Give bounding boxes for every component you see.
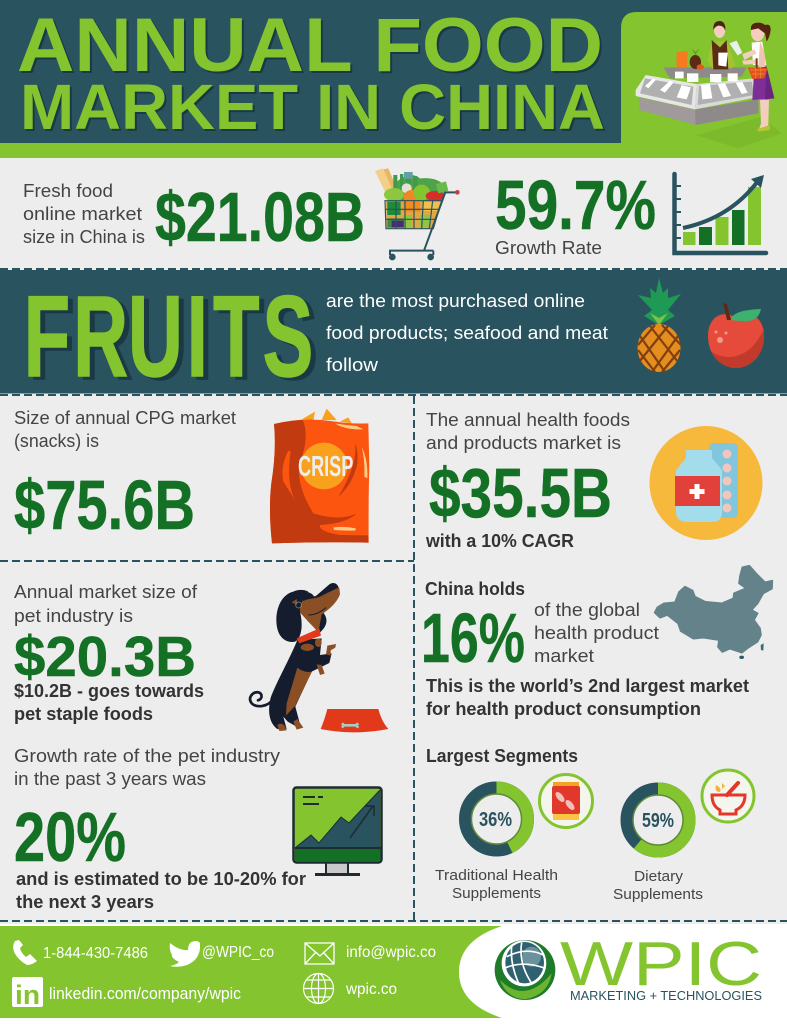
contact: website <box>304 974 397 1004</box>
text: CPG description: Size of annual CPG market <box>14 408 236 428</box>
text: of the global health product market: of the global <box>534 600 640 620</box>
stat: $21.08B: $21.08B <box>155 178 365 256</box>
text: marketing + technologies: MARKETING + TECHNOLOGIES <box>570 989 762 1003</box>
text: traditional health supplements label: Supplements <box>452 886 541 902</box>
stat: 20%: 20% <box>14 798 126 876</box>
text: of the global health product market: market <box>534 646 594 666</box>
text: 2nd largest market <box>426 676 749 719</box>
text: WPIC wordmark: WPIC <box>560 930 762 999</box>
icon: apple <box>708 303 764 368</box>
text: dietary supplements label <box>613 869 703 903</box>
text: health foods description: and products market is <box>426 433 621 453</box>
text: 2nd largest market: This is the world’s 2nd largest market <box>426 676 749 696</box>
text: pet growth estimate <box>16 869 306 912</box>
contact: linkedin: in <box>15 980 40 1010</box>
heading: FRUITS: FRUITS <box>24 272 313 401</box>
text: CAGR note: with a 10% CAGR <box>425 531 574 551</box>
chart: donut traditional health supplements 36%: 36% <box>479 809 512 831</box>
icon: WPIC globe <box>495 940 555 1000</box>
panel: header <box>0 0 787 158</box>
panel: fruits band <box>0 270 787 401</box>
text: fresh food description: Fresh food <box>23 181 113 201</box>
text: pet market description: Annual market size of <box>14 582 198 602</box>
text: health foods description <box>426 410 630 453</box>
icon: market counter with shopper <box>630 21 782 148</box>
text: pet growth estimate: the next 3 years <box>16 892 154 912</box>
title: MARKET IN CHINA <box>20 71 605 143</box>
chart: donut dietary supplements 59% <box>626 788 690 852</box>
contact: phone <box>13 940 148 965</box>
contact: email <box>305 943 436 964</box>
icon: pineapple <box>638 278 681 372</box>
logo: WPIC marketing + technologies <box>495 930 762 1003</box>
text: pet staple foods <box>14 681 204 724</box>
text: traditional health supplements label: Traditional Health <box>435 868 558 884</box>
text: CPG description <box>14 408 236 451</box>
text: health foods description: The annual health foods <box>426 410 630 430</box>
contact: linkedin: linkedin.com/company/wpic <box>49 985 241 1003</box>
text: dietary supplements label: Supplements <box>613 887 703 903</box>
text: fresh food description <box>23 181 145 247</box>
text: traditional health supplements label <box>435 868 558 902</box>
panel: health foods market <box>425 410 762 551</box>
icon: map of China <box>655 566 772 659</box>
text: pet staple foods: pet staple foods <box>14 704 153 724</box>
text: pet growth description: Growth rate of the pet industry <box>14 746 280 766</box>
text: China holds: China holds <box>425 579 525 599</box>
text: dietary supplements label: Dietary <box>634 869 684 885</box>
icon: dachshund and bowl <box>250 583 388 732</box>
icon: mortar and pestle <box>702 770 754 822</box>
title: ANNUAL FOOD <box>17 3 603 88</box>
contact: linkedin <box>12 977 241 1010</box>
contact: email: info@wpic.co <box>346 944 436 961</box>
icon: shopping cart of groceries <box>375 168 460 260</box>
stat: 59.7% growth rate: Growth Rate <box>495 238 602 258</box>
stat: 59.7% growth rate: 59.7% <box>495 166 656 244</box>
icon: crisp bag <box>270 409 369 543</box>
text: of the global health product market <box>534 600 659 666</box>
stat: $35.5B: $35.5B <box>429 454 612 532</box>
panel: China share of health product market <box>421 566 772 719</box>
text: pet growth estimate: and is estimated to be 10-20% for <box>16 869 306 889</box>
panel: CPG snacks market <box>14 408 369 544</box>
text: fruits description <box>326 291 608 375</box>
text: fresh food description: size in China is <box>23 227 145 247</box>
contact: twitter <box>170 941 274 967</box>
icon: monitor with rising chart <box>294 788 382 876</box>
text: pet growth description <box>14 746 280 789</box>
text: pet market description: pet industry is <box>14 606 133 626</box>
stat: $75.6B: $75.6B <box>14 466 195 544</box>
icon: supplement jar <box>540 774 592 828</box>
text: CPG description: (snacks) is <box>14 431 99 451</box>
text: fruits description: are the most purchased online <box>326 291 585 311</box>
text: pet market description <box>14 582 198 626</box>
panel: largest segments <box>426 746 754 903</box>
icon: medicine bottle <box>650 426 762 540</box>
chart: donut traditional health supplements 36% <box>465 788 528 850</box>
contact: phone: 1-844-430-7486 <box>43 945 148 962</box>
panel: pet industry <box>14 582 388 912</box>
contact: twitter: @WPIC_co <box>202 944 274 961</box>
contact: website: wpic.co <box>345 981 397 998</box>
chart: donut dietary supplements 59%: 59% <box>642 810 674 832</box>
text: of the global health product market: health product <box>534 623 659 643</box>
text: fruits description: follow <box>326 355 379 375</box>
stat: 16%: 16% <box>421 599 525 677</box>
icon: crisp bag: CRISP <box>298 451 353 483</box>
panel: footer <box>0 924 787 1024</box>
stat: $20.3B: $20.3B <box>14 625 196 689</box>
text: pet staple foods: $10.2B - goes towards <box>14 681 204 701</box>
icon: growth bar chart <box>674 174 766 253</box>
text: 2nd largest market: for health product consumption <box>426 699 701 719</box>
text: pet growth description: in the past 3 years was <box>14 769 206 789</box>
panel: fresh food online stat <box>23 166 766 260</box>
text: fresh food description: online market <box>23 204 142 224</box>
text: fruits description: food products; seafood and meat <box>326 323 608 343</box>
title <box>17 3 605 143</box>
heading: largest segments: Largest Segments <box>426 746 578 766</box>
